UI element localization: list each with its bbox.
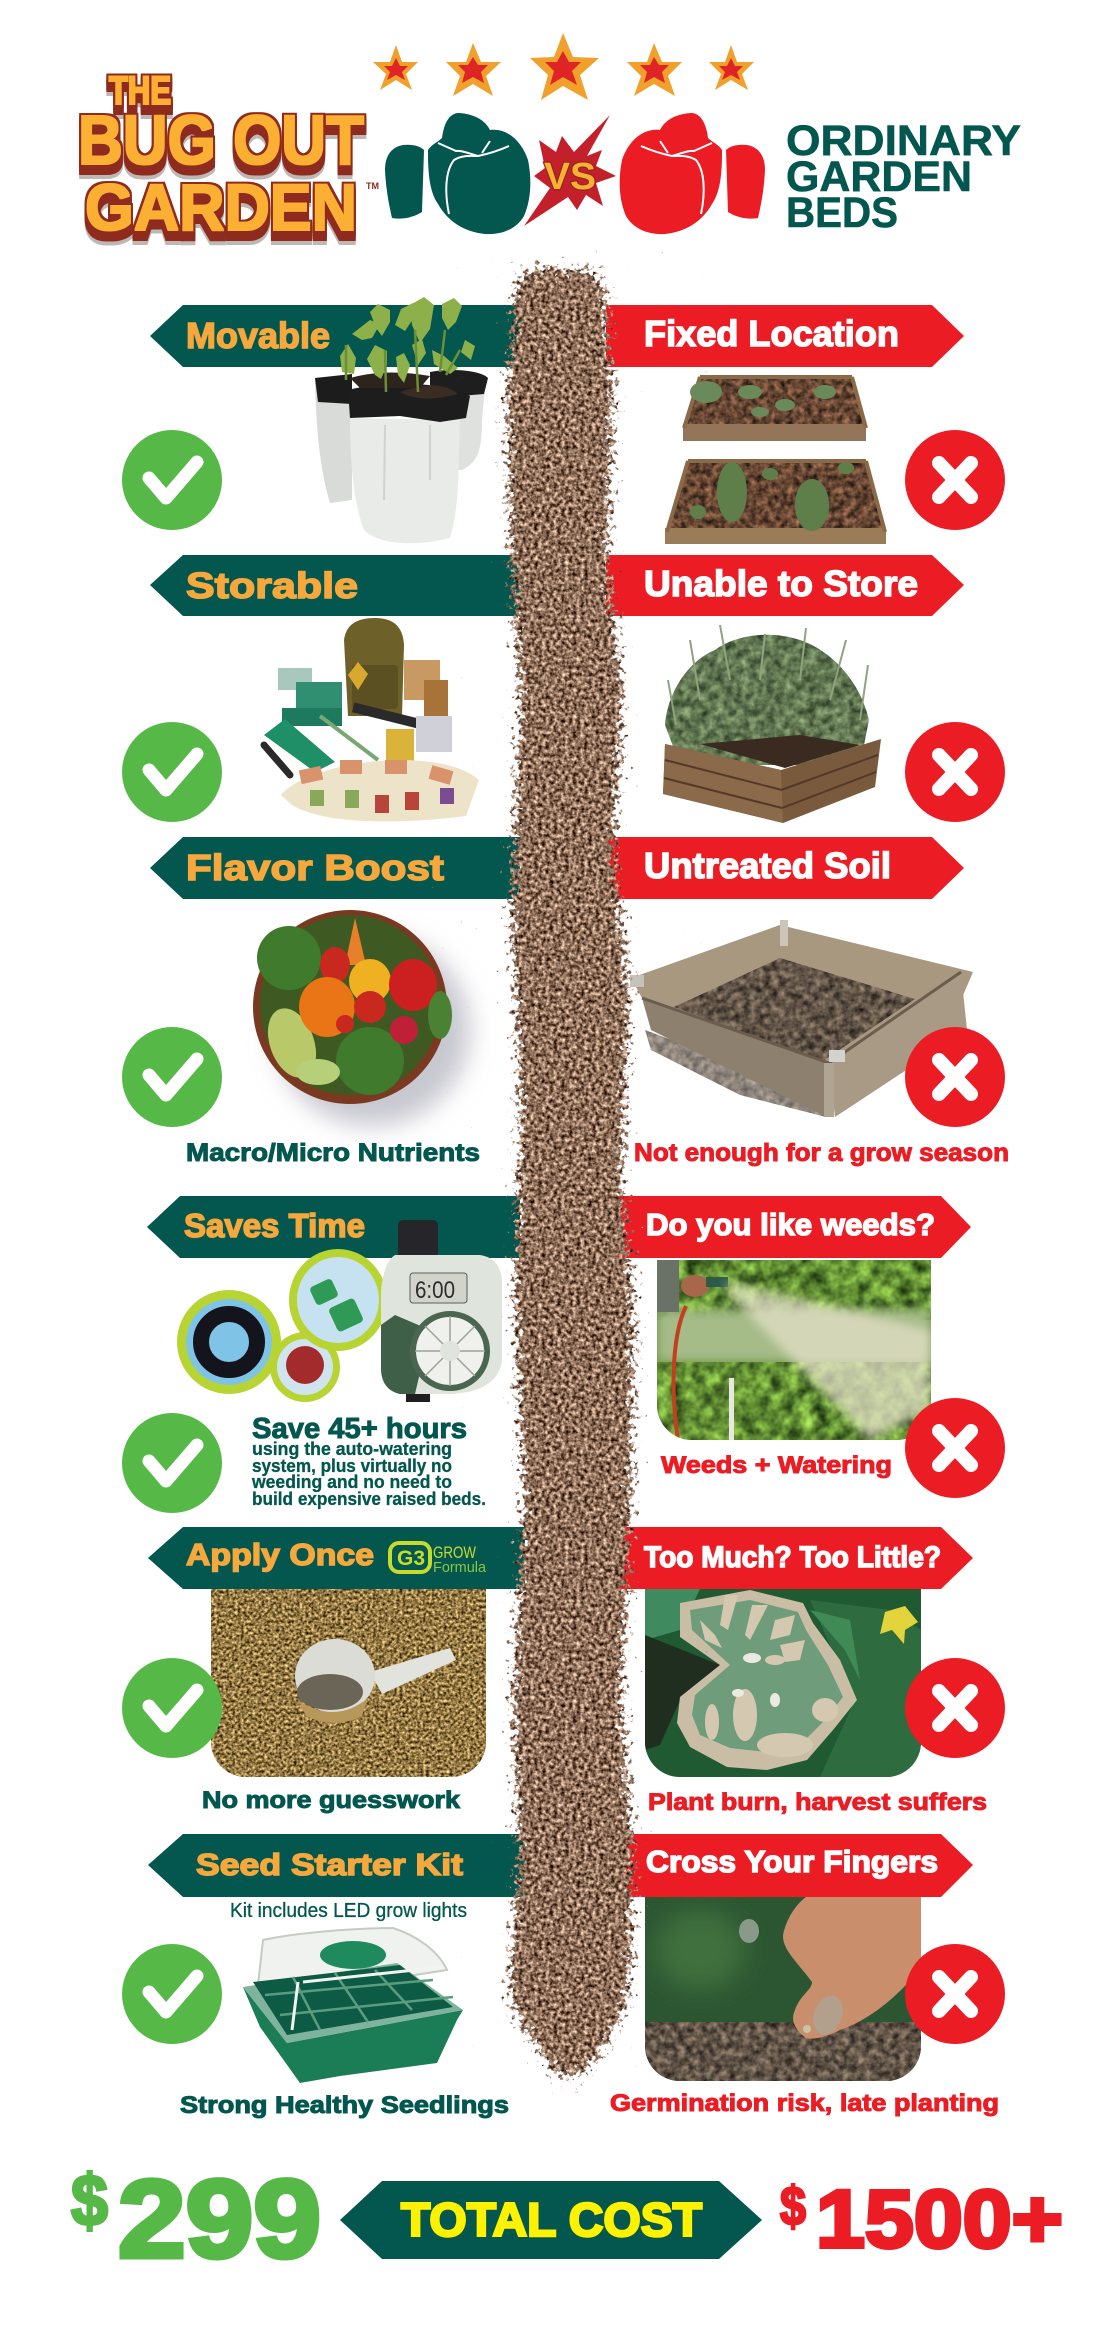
icon: red x, row 6 bbox=[905, 1944, 1005, 2044]
icon: digital water timer bbox=[381, 1220, 502, 1402]
icon: vs burst: VS bbox=[544, 156, 596, 198]
icon: hose circle bbox=[177, 1290, 281, 1394]
price: $299: $ bbox=[71, 2161, 108, 2241]
text: Save 45+ hours bbox=[251, 1413, 486, 1509]
banner: Do you like weeds?: Do you like weeds? bbox=[646, 1207, 935, 1242]
text: Save 45+ hours: build expensive raised beds. bbox=[252, 1489, 486, 1509]
text: Save 45+ hours: system, plus virtually no bbox=[252, 1456, 452, 1476]
icon: drippers circle bbox=[270, 1332, 340, 1402]
banner: Apply Once with G3 Grow Formula logo: Apply Once bbox=[186, 1537, 374, 1572]
text: Save 45+ hours: using the auto-watering bbox=[252, 1439, 452, 1459]
banner: Fixed Location bbox=[606, 305, 964, 367]
banner: Saves Time bbox=[147, 1196, 520, 1258]
heading: Ordinary Garden Beds: GARDEN bbox=[786, 153, 972, 201]
banner: Apply Once with G3 Grow Formula logo: Formula bbox=[433, 1559, 487, 1576]
image: overgrown raised bed bbox=[663, 625, 881, 823]
text: Plant burn, harvest suffers: Plant burn, harvest suffers bbox=[648, 1789, 987, 1816]
image: burnt leaf bbox=[645, 1589, 921, 1777]
image: seed starter tray bbox=[243, 1928, 463, 2083]
icon: red x, row 4 bbox=[905, 1398, 1005, 1498]
banner: Storable: Storable bbox=[186, 565, 358, 606]
icon: red x, row 3 bbox=[905, 1027, 1005, 1127]
banner: Apply Once with G3 Grow Formula logo: G3 bbox=[397, 1547, 425, 1570]
image: fertilizer granules with scoop bbox=[211, 1589, 486, 1777]
icon: vs burst bbox=[524, 115, 616, 226]
icon: green check, row 3 bbox=[122, 1027, 222, 1127]
image: hose watering weeds bbox=[657, 1260, 931, 1440]
soil divider column bbox=[510, 272, 630, 2085]
logo: The Bug Out Garden bbox=[78, 69, 364, 244]
image: bowl of vegetables bbox=[253, 910, 470, 1126]
icon: connectors circle bbox=[289, 1249, 387, 1351]
banner: Total Cost: TOTAL COST bbox=[401, 2193, 702, 2246]
logo: The Bug Out Garden: THE bbox=[109, 69, 171, 113]
image: bug out kit with backpack and seed packets bbox=[264, 618, 479, 821]
banner: Flavor Boost bbox=[150, 837, 520, 899]
banner: Apply Once with G3 Grow Formula logo: GROW bbox=[433, 1543, 476, 1562]
text: Weeds + Watering: Weeds + Watering bbox=[661, 1452, 892, 1479]
icon: green check, row 2 bbox=[122, 722, 222, 822]
image: grow bags with seedlings bbox=[315, 297, 488, 543]
trademark: TM bbox=[366, 181, 379, 191]
text: Save 45+ hours: Save 45+ hours bbox=[252, 1413, 467, 1445]
banner: Flavor Boost: Flavor Boost bbox=[186, 847, 444, 888]
icon: green boxing glove bbox=[385, 113, 530, 234]
banner: Movable: Movable bbox=[186, 315, 330, 356]
banner: Apply Once with G3 Grow Formula logo bbox=[148, 1527, 525, 1589]
icon: green check, row 4 bbox=[122, 1413, 222, 1513]
banner: Too Much? Too Little? bbox=[606, 1527, 973, 1589]
icon: green check, row 5 bbox=[122, 1658, 222, 1758]
icon: red boxing glove bbox=[620, 113, 765, 234]
image: drip irrigation parts and digital timer bbox=[177, 1220, 502, 1402]
banner: Seed Starter Kit: Seed Starter Kit bbox=[196, 1847, 463, 1882]
icon: red x, row 5 bbox=[905, 1658, 1005, 1758]
logo: The Bug Out Garden: GARDEN bbox=[85, 170, 357, 244]
text: No more guesswork: No more guesswork bbox=[202, 1787, 461, 1814]
text: Macro/Micro Nutrients: Macro/Micro Nutrients bbox=[186, 1139, 480, 1167]
text: Not enough for a grow season: Not enough for a grow season bbox=[634, 1139, 1009, 1167]
price: $299: 299 bbox=[118, 2158, 321, 2281]
icon: green check, row 1 bbox=[122, 430, 222, 530]
text: Kit includes LED grow lights: Kit includes LED grow lights bbox=[230, 1900, 467, 1922]
text: Strong Healthy Seedlings: Strong Healthy Seedlings bbox=[180, 2092, 509, 2119]
banner: Seed Starter Kit bbox=[148, 1834, 525, 1897]
header: star row bbox=[373, 33, 754, 100]
image: hand planting seed bbox=[645, 1897, 921, 2082]
heading: Ordinary Garden Beds: BEDS bbox=[786, 189, 898, 237]
banner: Storable bbox=[150, 555, 525, 616]
banner: Do you like weeds? bbox=[606, 1196, 971, 1258]
price: $1500+: 1500+ bbox=[816, 2174, 1063, 2265]
banner: Too Much? Too Little?: Too Much? Too Little? bbox=[644, 1541, 941, 1574]
text: Germination risk, late planting: Germination risk, late planting bbox=[610, 2090, 999, 2117]
heading: Ordinary Garden Beds bbox=[786, 117, 1021, 237]
logo: The Bug Out Garden: BUG OUT bbox=[78, 101, 364, 179]
banner: Unable to Store: Unable to Store bbox=[644, 563, 918, 604]
icon: red x, row 2 bbox=[905, 722, 1005, 822]
image: two fixed raised beds bbox=[665, 376, 886, 544]
heading: Ordinary Garden Beds: ORDINARY bbox=[786, 117, 1021, 165]
icon: red x, row 1 bbox=[905, 430, 1005, 530]
banner: Cross Your Fingers bbox=[606, 1834, 973, 1897]
icon: green check, row 6 bbox=[122, 1944, 222, 2044]
banner: Untreated Soil bbox=[606, 837, 964, 899]
image: empty wooden bed with untreated soil bbox=[630, 920, 973, 1117]
banner: Movable bbox=[150, 305, 520, 367]
banner: Untreated Soil: Untreated Soil bbox=[644, 845, 891, 886]
text: Save 45+ hours: weeding and no need to bbox=[251, 1472, 452, 1492]
banner: Cross Your Fingers: Cross Your Fingers bbox=[646, 1844, 938, 1879]
price: $1500+: $ bbox=[780, 2175, 806, 2237]
icon: digital water timer: 6:00 bbox=[415, 1277, 455, 1304]
banner: Total Cost bbox=[340, 2181, 762, 2259]
banner: Saves Time: Saves Time bbox=[184, 1207, 365, 1244]
banner: Unable to Store bbox=[606, 555, 964, 616]
banner: Fixed Location: Fixed Location bbox=[644, 313, 899, 354]
